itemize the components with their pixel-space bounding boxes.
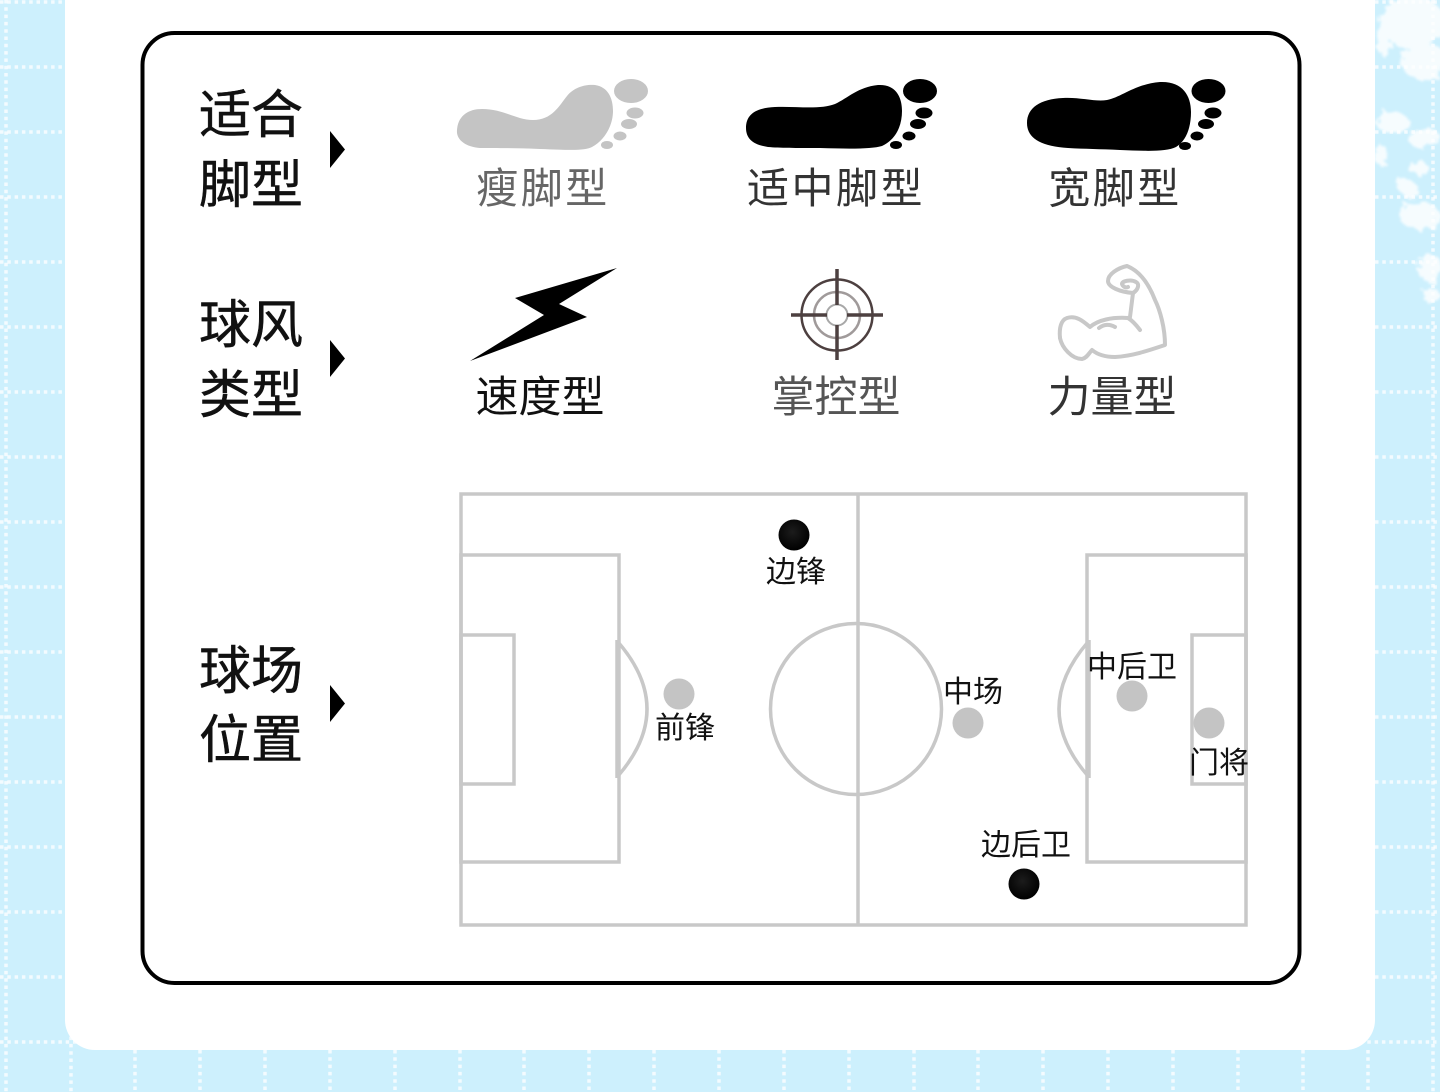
position: winger — [766, 520, 826, 589]
position: winger: 边锋 — [766, 556, 826, 589]
clouds — [1375, 0, 1440, 302]
heading: play style: 球风 — [199, 297, 303, 355]
position: centre back — [1087, 651, 1177, 712]
label: power: 力量型 — [1048, 374, 1176, 422]
heading: pitch position — [199, 643, 303, 770]
football pitch — [461, 494, 1246, 925]
position: midfielder — [943, 676, 1003, 738]
heading: suitable foot type — [199, 87, 303, 215]
label: speed: 速度型 — [476, 374, 604, 422]
label: medium foot: 适中脚型 — [747, 165, 925, 212]
foot: wide — [1027, 79, 1226, 151]
foot: medium — [746, 79, 937, 149]
position: full back: 边后卫 — [981, 829, 1071, 862]
arrow: foot type — [330, 131, 345, 168]
position: full back — [981, 829, 1071, 900]
panel card — [142, 33, 1300, 983]
position: goalkeeper — [1189, 708, 1249, 780]
heading: pitch position: 球场 — [199, 643, 303, 701]
heading: suitable foot type: 脚型 — [199, 157, 303, 215]
label: slim foot: 瘦脚型 — [476, 165, 610, 212]
arrow: position — [330, 685, 345, 722]
position: centre back: 中后卫 — [1087, 651, 1177, 684]
icon: target — [791, 269, 883, 360]
icon: lightning — [470, 268, 617, 361]
heading: play style — [199, 297, 303, 425]
icon: muscle — [1060, 266, 1165, 359]
heading: suitable foot type: 适合 — [199, 87, 303, 145]
position: goalkeeper: 门将 — [1189, 747, 1249, 780]
position: forward: 前锋 — [655, 712, 715, 745]
arrow: play style — [330, 340, 345, 377]
heading: play style: 类型 — [199, 367, 303, 425]
position: midfielder: 中场 — [943, 676, 1003, 709]
position: forward — [655, 678, 715, 745]
heading: pitch position: 位置 — [199, 712, 303, 770]
foot: slim — [457, 79, 648, 150]
label: control: 掌控型 — [772, 374, 900, 422]
label: wide foot: 宽脚型 — [1048, 165, 1182, 212]
